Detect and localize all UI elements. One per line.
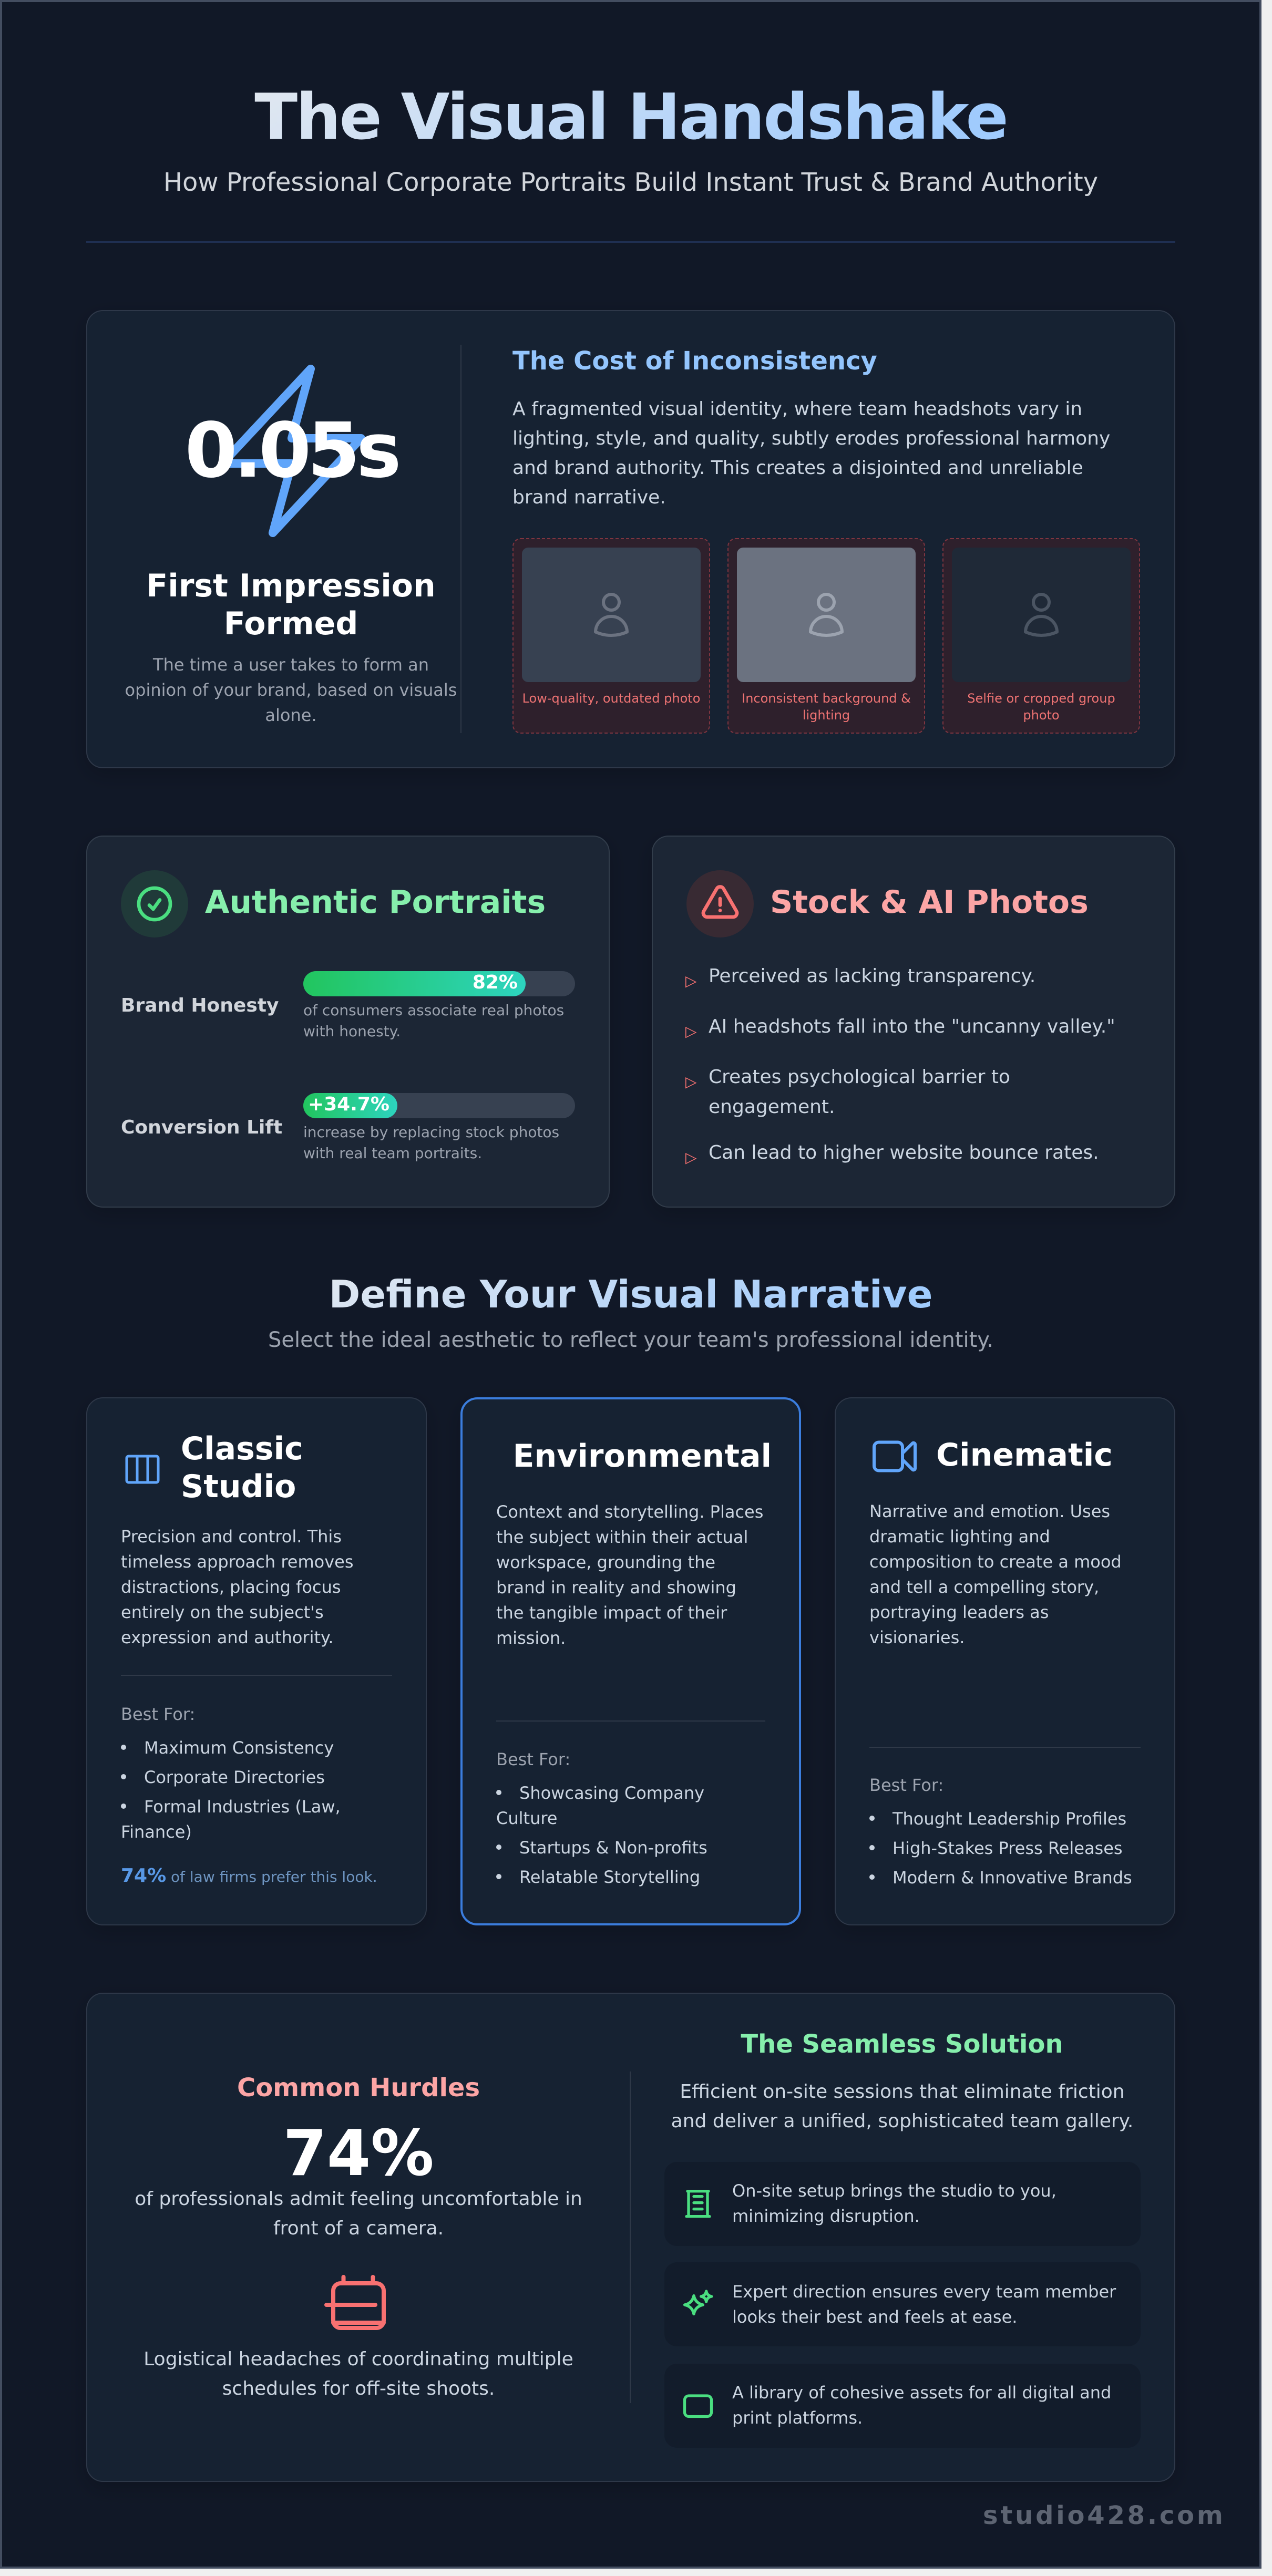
panel: authentic portraits xyxy=(87,836,609,1207)
metric: brand honesty: Brand Honesty xyxy=(121,995,279,1016)
heading: stock and AI photos: Stock & AI Photos xyxy=(770,884,1089,921)
text: environmental description: the tangible impact of their xyxy=(496,1603,727,1623)
icon: check circle xyxy=(121,870,188,937)
list: cinematic best for: High-Stakes Press Releases xyxy=(893,1838,1123,1858)
text: cinematic description: composition to create a mood xyxy=(869,1552,1122,1572)
solution item: on-site setup xyxy=(664,2162,1141,2246)
icon: video camera xyxy=(874,1442,915,1470)
list: stock photo drawbacks: Perceived as lacking transparency. xyxy=(709,965,1035,987)
heading: classic studio: Classic xyxy=(181,1430,303,1467)
list: environmental best for: Culture xyxy=(496,1808,557,1828)
card: inconsistent background xyxy=(728,539,925,733)
text: first impression description: opinion of your brand, based on visuals xyxy=(125,680,457,700)
list: stock photo drawbacks: Can lead to higher website bounce rates. xyxy=(709,1142,1099,1163)
text: cinematic description: and tell a compelling story, xyxy=(869,1577,1099,1597)
text: inconsistency description xyxy=(512,398,1110,508)
heading: authentic portraits: Authentic Portraits xyxy=(205,884,546,921)
list: classic best for: Maximum Consistency xyxy=(144,1738,334,1758)
metric: brand honesty xyxy=(121,971,575,1040)
icon: lightning bolt xyxy=(222,369,361,533)
text: classic description: expression and authority. xyxy=(121,1627,334,1647)
text: classic description: entirely on the subject's xyxy=(121,1602,324,1622)
list: classic best for xyxy=(121,1704,341,1842)
subtitle: How Professional Corporate Portraits Build Instant Trust & Brand Authority xyxy=(163,168,1098,197)
list: stock photo drawbacks: ▷ xyxy=(685,1023,697,1040)
solution item: cohesive library xyxy=(664,2364,1141,2448)
text: solution description: and deliver a unified, sophisticated team gallery. xyxy=(671,2110,1133,2132)
list: stock photo drawbacks: engagement. xyxy=(709,1096,835,1118)
solution item: on-site setup: minimizing disruption. xyxy=(732,2206,920,2226)
text: camera discomfort: of professionals admit feeling uncomfortable in xyxy=(135,2188,582,2210)
heading: common hurdles: Common Hurdles xyxy=(237,2073,480,2103)
heading: classic studio: Studio xyxy=(181,1468,296,1505)
text: environmental description: brand in reality and showing xyxy=(496,1578,736,1598)
heading: first impression formed: First Impression xyxy=(146,568,436,604)
metric: conversion lift: +34.7% xyxy=(308,1094,389,1115)
metric: conversion lift: with real team portraits. xyxy=(303,1145,482,1162)
heading: first impression formed xyxy=(146,568,436,642)
card: selfie or cropped photo: photo xyxy=(1023,708,1060,723)
text: solution description xyxy=(671,2081,1133,2132)
heading: classic studio xyxy=(181,1430,303,1505)
list: stock photo drawbacks: AI headshots fall into the "uncanny valley." xyxy=(709,1016,1115,1037)
metric: conversion lift: increase by replacing stock photos xyxy=(303,1124,559,1141)
metric: brand honesty: of consumers associate real photos xyxy=(303,1002,564,1019)
card: cinematic xyxy=(835,1398,1175,1925)
text: cinematic description: portraying leaders as xyxy=(869,1602,1049,1622)
panel: hurdles and solution xyxy=(87,1993,1175,2481)
solution item: on-site setup: On-site setup brings the studio to you, xyxy=(732,2181,1056,2201)
list: stock photo drawbacks: Creates psychological barrier to xyxy=(709,1066,1010,1088)
card: selfie or cropped photo xyxy=(943,539,1140,733)
stat: 0.05s: 0.05s xyxy=(185,406,398,494)
stat: 74 percent of law firms: 74% xyxy=(121,1865,166,1887)
card: classic studio xyxy=(87,1398,426,1925)
section heading: define your visual narrative xyxy=(268,1272,993,1352)
header xyxy=(86,81,1175,243)
text: classic description: timeless approach removes xyxy=(121,1552,353,1572)
heading: environmental: Environmental xyxy=(513,1438,772,1475)
heading: the seamless solution: The Seamless Solution xyxy=(741,2029,1063,2059)
metric: conversion lift: Conversion Lift xyxy=(121,1117,282,1138)
list: environmental best for: Relatable Storytelling xyxy=(519,1867,700,1887)
metric: brand honesty: 82% xyxy=(473,972,518,993)
solution item: expert direction: Expert direction ensures every team member xyxy=(732,2282,1116,2302)
text: inconsistency description: lighting, style, and quality, subtly erodes professional harmony xyxy=(512,428,1110,449)
icon: columns xyxy=(127,1456,158,1482)
solution item: cohesive library: print platforms. xyxy=(732,2408,863,2428)
panel: stock and AI photos xyxy=(652,836,1175,1207)
card: selfie or cropped photo: Selfie or cropped group xyxy=(967,691,1115,706)
list: cinematic best for: Best For: xyxy=(869,1775,943,1795)
text: logistical headaches: schedules for off-site shoots. xyxy=(222,2378,495,2399)
text: solution description: Efficient on-site sessions that eliminate friction xyxy=(680,2081,1125,2103)
list: stock photo drawbacks xyxy=(685,965,1115,1166)
card: low-quality photo xyxy=(513,539,710,733)
card: low-quality photo: Low-quality, outdated photo xyxy=(522,691,700,706)
text: environmental description xyxy=(496,1502,763,1648)
metric: conversion lift xyxy=(121,1093,575,1162)
list: cinematic best for: Thought Leadership Profiles xyxy=(892,1809,1126,1829)
watermark: studio428.com xyxy=(983,2501,1226,2530)
text: cinematic description: Narrative and emotion. Uses xyxy=(869,1501,1110,1521)
stat: 74 percent: 74% xyxy=(283,2117,434,2190)
text: environmental description: mission. xyxy=(496,1628,566,1648)
text: environmental description: the subject within their actual xyxy=(496,1527,748,1547)
list: classic best for: Formal Industries (Law, xyxy=(144,1797,341,1817)
text: first impression description xyxy=(125,655,457,725)
stat: 74 percent of law firms: of law firms prefer this look. xyxy=(171,1868,377,1885)
section heading: define your visual narrative: Define Your Visual Narrative xyxy=(329,1272,932,1316)
text: inconsistency description: and brand authority. This creates a disjointed and unreliable xyxy=(512,457,1083,479)
heading: the cost of inconsistency: The Cost of Inconsistency xyxy=(512,346,877,376)
stat: 74 percent of law firms xyxy=(121,1865,377,1887)
list: cinematic best for: Modern & Innovative Brands xyxy=(893,1868,1132,1888)
title: The Visual Handshake xyxy=(254,81,1007,154)
icon: calendar xyxy=(326,2277,384,2328)
list: stock photo drawbacks: ▷ xyxy=(685,972,697,990)
text: classic description: Precision and control. This xyxy=(121,1527,342,1547)
list: environmental best for: Best For: xyxy=(496,1749,570,1769)
text: inconsistency description: A fragmented visual identity, where team headshots vary in xyxy=(512,398,1082,420)
text: camera discomfort: front of a camera. xyxy=(273,2218,444,2239)
text: first impression description: The time a user takes to form an xyxy=(152,655,429,675)
list: environmental best for xyxy=(496,1749,707,1887)
text: cinematic description: visionaries. xyxy=(869,1627,965,1647)
icon: warning triangle xyxy=(686,870,754,937)
text: logistical headaches xyxy=(143,2348,573,2399)
list: cinematic best for xyxy=(869,1775,1132,1888)
heading: first impression formed: Formed xyxy=(224,605,358,642)
metric: brand honesty: with honesty. xyxy=(303,1023,401,1040)
text: classic description xyxy=(121,1527,353,1647)
list: classic best for: Finance) xyxy=(121,1822,192,1842)
list: classic best for: Corporate Directories xyxy=(144,1767,325,1787)
panel: first impression and cost of inconsistency xyxy=(87,311,1175,768)
text: cinematic description: dramatic lighting and xyxy=(869,1527,1050,1547)
text: first impression description: alone. xyxy=(265,705,317,725)
section heading: define your visual narrative: Select the ideal aesthetic to reflect your team's professional identity. xyxy=(268,1328,993,1352)
solution item: cohesive library: A library of cohesive assets for all digital and xyxy=(732,2383,1111,2403)
card: inconsistent background: lighting xyxy=(803,708,850,723)
solution item: expert direction xyxy=(664,2262,1141,2346)
text: environmental description: Context and storytelling. Places xyxy=(496,1502,763,1522)
text: logistical headaches: Logistical headaches of coordinating multiple xyxy=(143,2348,573,2370)
text: environmental description: workspace, grounding the xyxy=(496,1552,715,1572)
list: environmental best for: Showcasing Company xyxy=(519,1783,704,1803)
heading: cinematic: Cinematic xyxy=(936,1437,1113,1474)
solution item: expert direction: looks their best and feels at ease. xyxy=(732,2307,1017,2327)
text: inconsistency description: brand narrative. xyxy=(512,487,666,508)
card: environmental xyxy=(461,1398,800,1924)
text: cinematic description xyxy=(869,1501,1122,1647)
list: classic best for: Best For: xyxy=(121,1704,195,1724)
text: classic description: distractions, placing focus xyxy=(121,1577,341,1597)
list: stock photo drawbacks: ▷ xyxy=(685,1073,697,1090)
list: environmental best for: Startups & Non-profits xyxy=(519,1838,707,1858)
text: camera discomfort xyxy=(135,2188,582,2239)
list: stock photo drawbacks: ▷ xyxy=(685,1149,697,1166)
card: inconsistent background: Inconsistent background & xyxy=(742,691,911,706)
